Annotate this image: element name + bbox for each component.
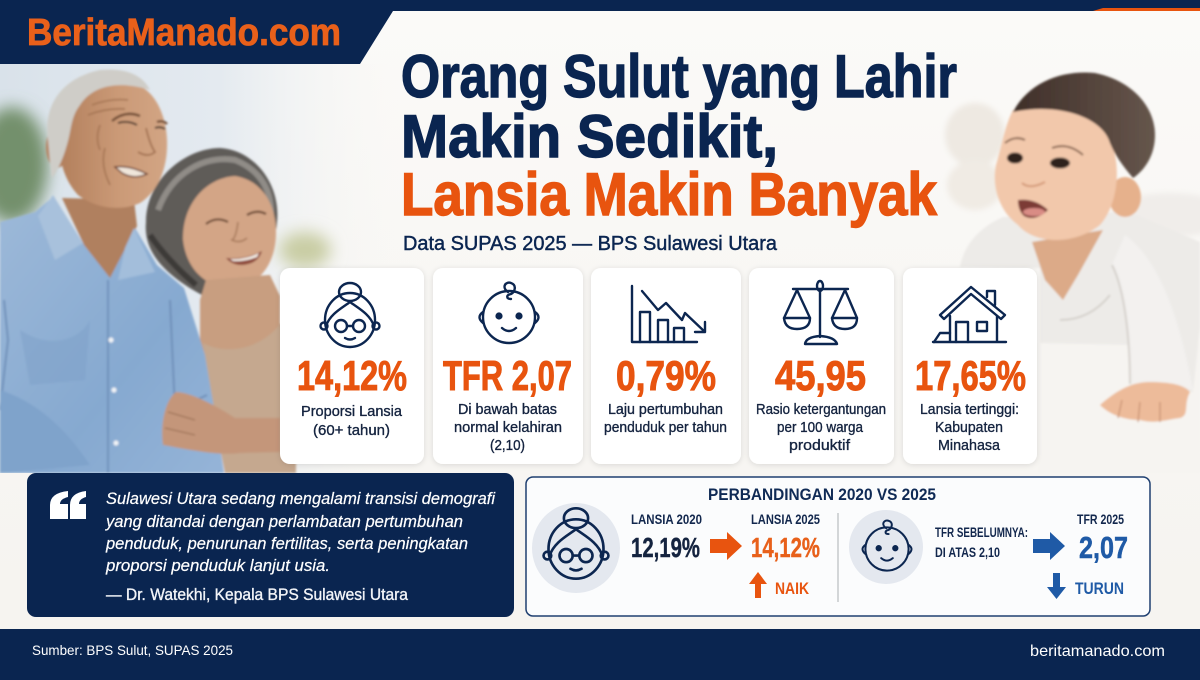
lansia 2020: 12,19% <box>631 532 700 563</box>
stat description <box>604 401 727 436</box>
panel: growth rate card <box>591 268 741 464</box>
stat description <box>454 401 562 454</box>
stat description: Kabupaten <box>935 419 1003 436</box>
tfr previous: TFR SEBELUMNYA: <box>935 524 1028 540</box>
arrow: orange up <box>749 572 767 598</box>
icon: baby in circle <box>849 510 923 584</box>
stat description: produktif <box>789 437 851 454</box>
tfr 2025 <box>1077 511 1128 565</box>
lansia 2025 <box>751 511 820 563</box>
stat description <box>920 401 1019 454</box>
stat description: per 100 warga <box>777 419 864 436</box>
stat value: 0,79% <box>616 352 716 399</box>
website text: beritamanado.com <box>1030 643 1165 660</box>
label: naik: NAIK <box>775 579 810 598</box>
icon: house <box>933 287 1006 342</box>
subtitle: Data SUPAS 2025 — BPS Sulawesi Utara <box>403 233 778 255</box>
woman <box>146 148 277 295</box>
quote text: yang ditandai dengan perlambatan pertumbuhan <box>105 512 463 531</box>
tfr 2025: 2,07 <box>1079 530 1128 565</box>
quote text <box>105 489 496 575</box>
icon: elderly woman in circle <box>532 503 620 593</box>
icon: falling bar chart <box>632 286 705 342</box>
panel: dependency ratio card <box>749 268 894 464</box>
lansia 2020: LANSIA 2020 <box>631 511 702 527</box>
arrow: orange right <box>710 532 742 560</box>
icon: baby face <box>480 283 538 343</box>
stat description: Laju pertumbuhan <box>608 401 723 418</box>
stat description: normal kelahiran <box>454 419 562 436</box>
stat description: (2,10) <box>490 437 525 454</box>
lansia 2025: LANSIA 2025 <box>751 511 820 527</box>
stat description: Di bawah batas <box>458 401 557 418</box>
comparison heading: PERBANDINGAN 2020 VS 2025 <box>708 485 936 504</box>
stat description <box>301 403 403 439</box>
quote attribution: — Dr. Watekhi, Kepala BPS Sulawesi Utara <box>106 586 409 604</box>
title: Makin Sedikit, <box>401 103 778 170</box>
logo text: BeritaManado.com <box>27 12 341 54</box>
photo: baby <box>944 70 1200 423</box>
quote text: Sulawesi Utara sedang mengalami transisi demografi <box>106 489 496 508</box>
title: Lansia Makin Banyak <box>401 161 938 228</box>
source text: Sumber: BPS Sulut, SUPAS 2025 <box>32 642 233 658</box>
arrow: blue down <box>1047 573 1066 599</box>
tfr previous: DI ATAS 2,10 <box>935 544 1000 560</box>
tfr previous <box>935 524 1028 560</box>
stat description: penduduk per tahun <box>604 419 727 436</box>
stat description: Rasio ketergantungan <box>756 401 886 418</box>
label: turun: TURUN <box>1075 579 1124 598</box>
lansia 2020 <box>631 511 702 563</box>
icon: elderly woman <box>320 283 380 347</box>
hands <box>162 392 280 454</box>
header band with logo tab <box>0 0 1200 64</box>
title: Orang Sulut yang Lahir <box>401 43 957 110</box>
stat description: Lansia tertinggi: <box>920 401 1019 418</box>
quote text: penduduk, penurunan fertilitas, serta peningkatan <box>105 534 468 553</box>
title <box>401 43 957 228</box>
stat description: (60+ tahun) <box>313 422 390 439</box>
stat value: 17,65% <box>915 352 1026 399</box>
quote text: proporsi penduduk lanjut usia. <box>105 556 330 575</box>
stat value: 45,95 <box>775 352 866 399</box>
stat description: Proporsi Lansia <box>301 403 403 420</box>
panel: lansia proportion card <box>280 268 424 464</box>
panel: comparison 2020 vs 2025 <box>526 477 1150 616</box>
panel: TFR card <box>433 268 583 464</box>
arrow: blue right <box>1033 532 1065 560</box>
stat value: 14,12% <box>297 352 407 399</box>
stat value: TFR 2,07 <box>443 352 572 399</box>
stat description <box>756 401 886 454</box>
accent: orange top right line <box>1093 8 1200 11</box>
tfr 2025: TFR 2025 <box>1077 511 1124 527</box>
icon: quotation mark <box>50 491 86 519</box>
icon: scales <box>784 281 857 344</box>
photo: elderly couple <box>0 64 340 473</box>
panel: quote <box>27 473 514 617</box>
man <box>0 197 224 473</box>
stat description: Minahasa <box>938 437 1001 454</box>
lansia 2025: 14,12% <box>751 532 820 563</box>
footer <box>0 629 1200 680</box>
panel: highest elderly card <box>903 268 1037 464</box>
